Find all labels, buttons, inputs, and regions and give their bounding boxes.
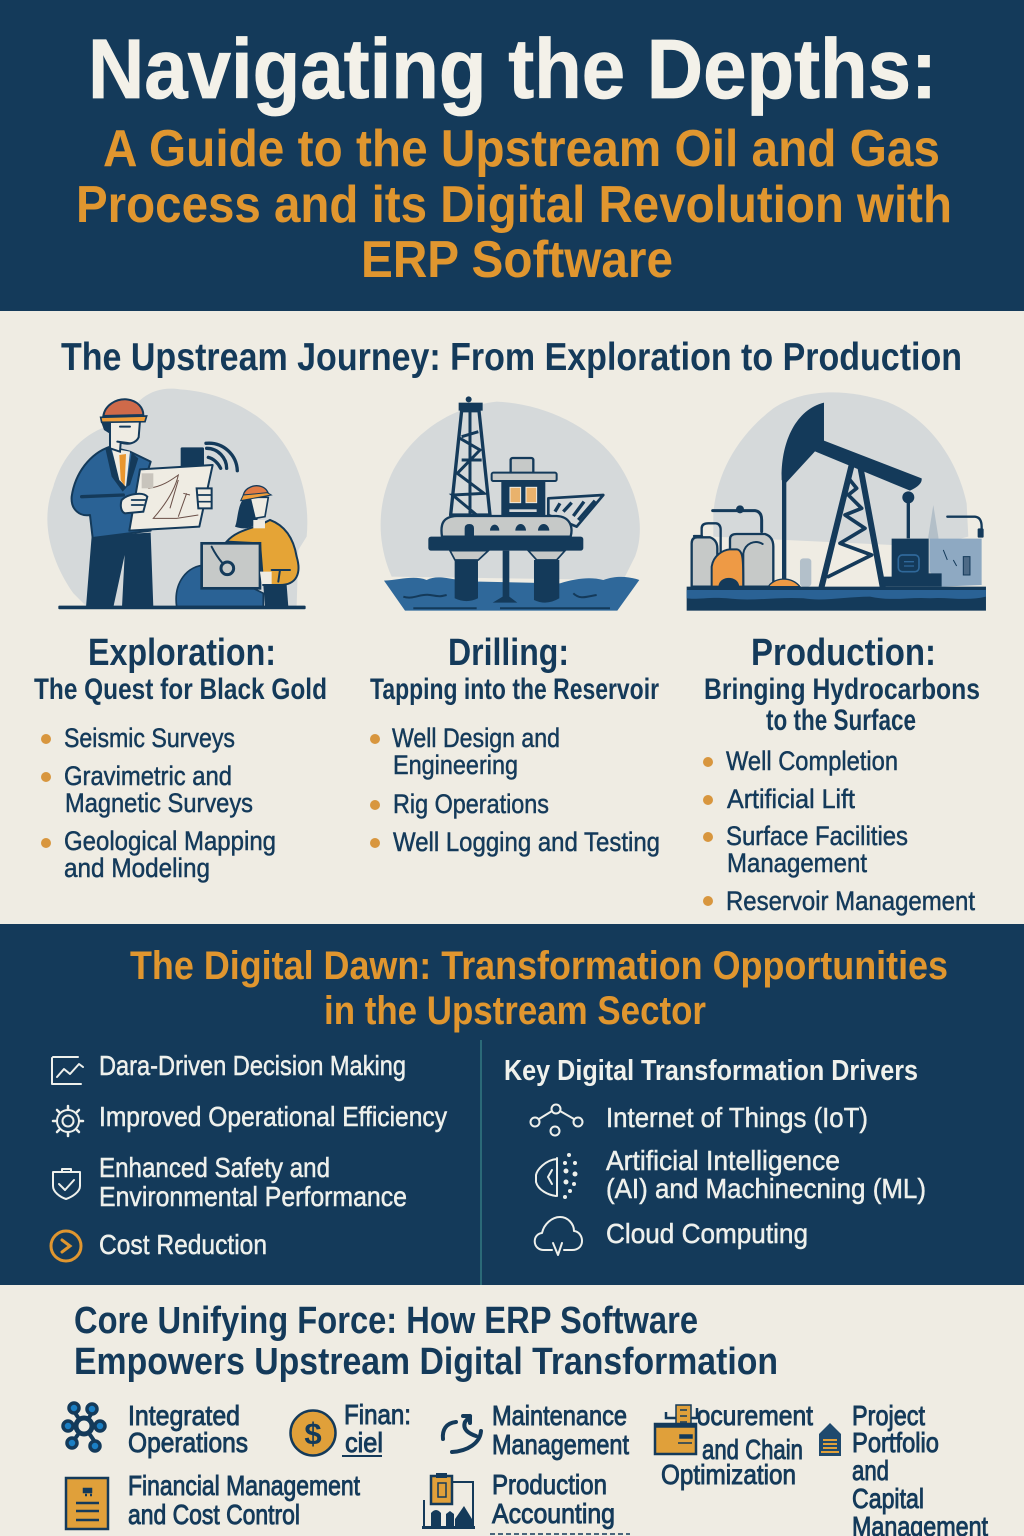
text: project portfolio and capital management: Portfolio — [852, 1427, 939, 1458]
illustration: offshore drilling rig — [381, 396, 640, 611]
text: financial — [342, 1399, 411, 1458]
icon: AI head — [536, 1153, 578, 1199]
title: Navigating the Depths: — [88, 22, 937, 116]
heading: exploration: Exploration: — [88, 632, 276, 674]
bullet list: production: Management — [727, 848, 867, 878]
icon: line chart — [52, 1057, 83, 1084]
icon: maintenance arrows — [443, 1416, 481, 1452]
icon: gear — [53, 1106, 83, 1136]
list: key digital drivers — [504, 1055, 926, 1255]
panel: header — [0, 0, 1024, 311]
text: financial: ciel — [345, 1427, 383, 1458]
bullet list: production — [703, 746, 975, 916]
bullet list: exploration: Magnetic Surveys — [65, 788, 253, 818]
heading: digital dawn: in the Upstream Sector — [324, 989, 706, 1033]
text: financial: Finan: — [344, 1399, 411, 1430]
bullet list: exploration: Gravimetric and — [64, 761, 232, 791]
item: financial management — [66, 1470, 360, 1530]
icon: cost reduction — [51, 1231, 81, 1261]
heading: digital dawn — [130, 944, 948, 1033]
heading: production: Production: — [751, 632, 936, 674]
text: project portfolio and capital management: and — [852, 1455, 889, 1486]
bullet list: drilling — [370, 723, 660, 857]
text: project portfolio and capital management: Capital — [852, 1483, 924, 1514]
column: drilling — [370, 632, 660, 857]
item: maintenance management — [443, 1400, 629, 1460]
icon: production clipboard — [422, 1473, 475, 1529]
text: procurement and supply chain: Optimization — [661, 1459, 796, 1490]
text: safety and environmental — [99, 1152, 407, 1212]
text: cost reduction: Cost Reduction — [99, 1229, 267, 1260]
text: cloud computing: Cloud Computing — [606, 1218, 808, 1249]
panel: digital dawn — [0, 924, 1024, 1285]
text: AI and ML: Artificial Intelligence — [606, 1145, 840, 1176]
icon: IoT nodes — [530, 1104, 582, 1136]
subheading: production: to the Surface — [766, 704, 916, 737]
subheading: drilling: Tapping into the Reservoir — [370, 673, 659, 706]
bullet list: exploration: Seismic Surveys — [64, 723, 235, 753]
icon: network — [63, 1403, 105, 1451]
text: improved operational efficiency: Improved Operational Efficiency — [99, 1101, 447, 1132]
panel: upstream journey — [0, 311, 1024, 924]
list: transformation opportunities — [51, 1050, 447, 1261]
heading: core unifying force: Empowers Upstream Digital Transformation — [74, 1341, 778, 1383]
text: project portfolio and capital management: Project — [852, 1400, 925, 1431]
text: data-driven decision making: Dara-Driven Decision Making — [99, 1050, 406, 1081]
text: financial management and cost control: Financial Management — [128, 1470, 360, 1501]
bullet list: drilling: Well Logging and Testing — [393, 827, 660, 857]
icon: project building — [819, 1423, 841, 1456]
illustration: exploration geologists — [47, 389, 307, 609]
text: AI and ML — [606, 1145, 926, 1204]
column: production — [703, 632, 980, 916]
illustration: pumpjack production — [687, 392, 986, 611]
text: financial management and cost control — [128, 1470, 360, 1530]
icon: cloud — [535, 1217, 582, 1255]
icon: dollar coin: $ — [304, 1416, 322, 1451]
column: exploration — [34, 632, 327, 883]
text: production accounting: Accounting — [492, 1498, 615, 1529]
heading: core unifying force — [74, 1300, 778, 1383]
text: integrated operations: Integrated — [128, 1400, 240, 1431]
icon: safety shield — [53, 1169, 80, 1199]
subheading: production — [704, 673, 980, 737]
text: integrated operations: Operations — [128, 1427, 248, 1458]
heading: core unifying force: Core Unifying Force: How ERP Software — [74, 1300, 698, 1342]
bullet list: production: Artificial Lift — [727, 784, 855, 814]
item: financial — [290, 1399, 411, 1458]
item: production accounting — [422, 1469, 630, 1534]
icon: procurement box — [655, 1404, 698, 1454]
subtitle: ERP Software — [361, 231, 673, 289]
text: procurement and supply chain: and Chain — [702, 1434, 803, 1465]
bullet list: production: Well Completion — [726, 746, 898, 776]
bullet list: exploration — [41, 723, 276, 883]
subheading: exploration: The Quest for Black Gold — [34, 673, 327, 706]
text: safety and environmental: Enhanced Safety and — [99, 1152, 330, 1183]
subtitle — [76, 120, 952, 289]
text: procurement and supply chain — [661, 1400, 813, 1490]
text: maintenance management: Management — [492, 1429, 629, 1460]
text: maintenance management — [492, 1400, 629, 1460]
text: safety and environmental: Environmental Performance — [99, 1181, 407, 1212]
text: AI and ML: (AI) and Machinecning (ML) — [606, 1173, 926, 1204]
bullet list: drilling: Well Design and — [392, 723, 560, 753]
item: project portfolio — [819, 1400, 988, 1536]
heading: digital dawn: The Digital Dawn: Transformation Opportunities — [130, 944, 948, 988]
icon: financial document — [66, 1478, 108, 1529]
bullet list: drilling: Engineering — [393, 750, 518, 780]
item: integrated operations — [63, 1400, 248, 1458]
heading: key drivers: Key Digital Transformation Drivers — [504, 1055, 918, 1087]
text: maintenance management: Maintenance — [492, 1400, 627, 1431]
subtitle: A Guide to the Upstream Oil and Gas — [103, 120, 940, 178]
heading: drilling: Drilling: — [448, 632, 569, 674]
bullet list: production: Surface Facilities — [726, 821, 908, 851]
text: IoT: Internet of Things (IoT) — [606, 1102, 868, 1133]
text: project portfolio and capital management — [852, 1400, 988, 1536]
bullet list: drilling: Rig Operations — [393, 789, 549, 819]
text: production accounting — [490, 1469, 630, 1534]
text: procurement and supply chain: Procurement — [672, 1400, 813, 1431]
bullet list: exploration: and Modeling — [64, 853, 210, 883]
item: procurement — [655, 1400, 813, 1490]
bullet list: exploration: Geological Mapping — [64, 826, 276, 856]
panel: core unifying force — [0, 1285, 1024, 1536]
subtitle: Process and its Digital Revolution with — [76, 176, 952, 234]
bullet list: production: Reservoir Management — [726, 886, 975, 916]
text: integrated operations — [128, 1400, 248, 1458]
text: financial management and cost control: and Cost Control — [128, 1499, 300, 1530]
text: production accounting: Production — [492, 1469, 607, 1500]
